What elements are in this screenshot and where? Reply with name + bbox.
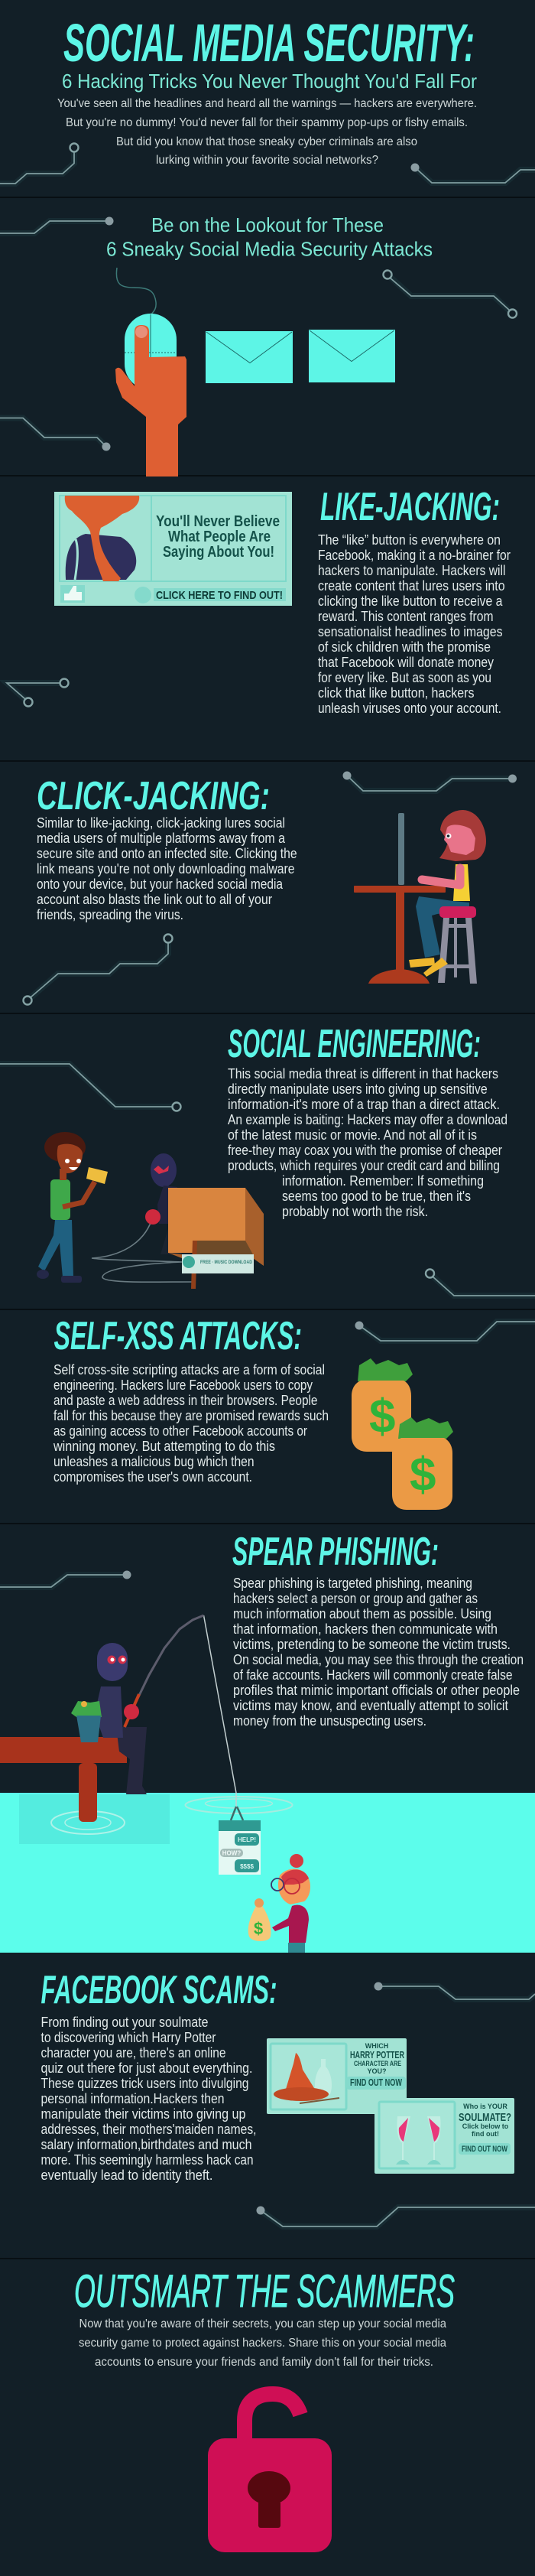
seat	[439, 906, 476, 918]
face and arm	[422, 825, 475, 885]
circuit: self-xss	[355, 1322, 535, 1341]
text: self-xss	[53, 1362, 329, 1485]
panel: soulmate quiz card	[374, 2098, 514, 2174]
water	[0, 1793, 535, 1953]
intro text: You've seen all the headlines and heard all the warnings — hackers are everywhere.	[57, 97, 477, 110]
intro text: But did you know that those sneaky cyber criminals are also	[116, 135, 417, 148]
body	[272, 1905, 309, 1943]
phone	[219, 1820, 261, 1875]
illustration: man with credit card	[37, 1132, 108, 1283]
text: self-xss: fall for this because they are promised rewards such	[54, 1408, 329, 1423]
text: facebook scams: salary information,birthdates and much	[41, 2137, 252, 2152]
pants	[416, 896, 469, 958]
circuit: like-jacking	[7, 679, 69, 707]
text: closing: security game to protect against hackers. Share this on your social media	[79, 2337, 446, 2350]
eyes	[107, 1655, 127, 1664]
text: click-jacking	[37, 815, 297, 922]
hair	[439, 810, 486, 861]
text: click-jacking: account also blasts the link out to all of your	[37, 892, 272, 907]
legs	[38, 1220, 73, 1277]
text: facebook scams: character you are, there's an online	[41, 2045, 226, 2060]
head	[97, 1643, 128, 1681]
ad button: CLICK HERE TO FIND OUT!	[156, 589, 283, 602]
circuit: lower left	[0, 418, 110, 451]
quiz text: WHICH	[365, 2042, 388, 2050]
text: facebook scams: eventually lead to identity theft.	[41, 2168, 212, 2183]
text: social engineering: free-they may coax you with the promise of cheaper	[228, 1143, 502, 1158]
quiz button: FIND OUT NOW	[350, 2077, 403, 2088]
quiz text: CHARACTER ARE	[354, 2060, 401, 2068]
bait card: FREE · MUSIC DOWNLOAD	[200, 1260, 253, 1265]
text: like-jacking: Facebook, making it a no-brainer for	[318, 548, 511, 563]
text: social engineering: information-it's more of a trap than a direct attack.	[228, 1097, 500, 1112]
circuit: spear phishing	[0, 1571, 131, 1587]
text: self-xss: and paste a web address in their browsers. People	[54, 1393, 318, 1408]
circuit: click-jacking bottom	[23, 935, 173, 1005]
text: facebook scams: manipulate their victims into giving up	[41, 2106, 246, 2122]
circuit: social engineering bottom	[426, 1270, 535, 1296]
quiz text	[350, 2042, 404, 2075]
icon: thumbs up	[60, 585, 85, 603]
quiz text: find out!	[472, 2130, 499, 2138]
circuit: top left	[0, 144, 78, 184]
hair	[44, 1132, 86, 1163]
quiz text: Who is YOUR	[463, 2103, 507, 2110]
hacker	[145, 1153, 182, 1254]
text: like-jacking: clicking the like button to receive a	[318, 594, 503, 609]
subtitle: 6 Hacking Tricks You Never Thought You'd Fall For	[62, 70, 477, 93]
circuit: social engineering top	[0, 1064, 180, 1111]
intro text: But you're no dummy! You'd never fall for their spammy pop-ups or fishy emails.	[66, 116, 468, 129]
text: closing: accounts to ensure your friends and family don't fall for their tricks.	[95, 2356, 433, 2369]
text: facebook scams: more. This seemingly harmless hack can	[41, 2152, 254, 2168]
text: click-jacking: friends, spreading the virus.	[37, 907, 183, 922]
quiz text: SOULMATE?	[459, 2111, 511, 2124]
text: like-jacking: sensationalist headlines to images	[318, 624, 503, 639]
text: self-xss: winning money. But attempting to do this	[53, 1439, 275, 1454]
shirt	[50, 1179, 70, 1220]
heading: facebook scams: FACEBOOK SCAMS:	[41, 1968, 277, 2012]
text: social engineering: of the latest music or movie. And not all of it is	[228, 1127, 477, 1143]
text: spear phishing: victims may know, and eventually attempt to solicit	[233, 1698, 508, 1713]
illustration: hacker fishing	[0, 1615, 243, 1822]
illustration: woman with money bag	[248, 1854, 310, 1953]
text: self-xss: as gaining access to other Facebook accounts or	[54, 1423, 307, 1439]
bun	[290, 1854, 303, 1868]
text: click-jacking: secure site and onto an infected site. Clicking the	[37, 846, 297, 861]
hook	[231, 1807, 243, 1820]
text: spear phishing: much information about them as possible. Using	[233, 1606, 491, 1621]
money bag: $	[254, 1919, 263, 1938]
panel: like-jacking ad	[54, 492, 292, 606]
icon: wine glasses	[396, 2116, 441, 2165]
text: social engineering: information. Remember: If something	[282, 1173, 484, 1189]
text: like-jacking: reward. This content ranges from	[318, 609, 494, 624]
neck	[60, 1169, 66, 1180]
lookout heading: Be on the Lookout for These	[151, 213, 384, 236]
circuit: lookout right	[384, 271, 517, 318]
card	[86, 1167, 108, 1184]
ad headline: What People Are	[168, 529, 271, 545]
shoes	[409, 958, 448, 977]
text: spear phishing	[233, 1576, 524, 1729]
arm	[63, 1182, 95, 1207]
top	[453, 864, 470, 901]
text: click-jacking: Similar to like-jacking, click-jacking lures social	[37, 815, 285, 831]
hair	[281, 1869, 309, 1885]
text: facebook scams: quiz out there for just about everything.	[41, 2060, 252, 2076]
text: facebook scams: From finding out your soulmate	[41, 2015, 208, 2030]
icon: envelopes	[206, 330, 395, 383]
text: click-jacking: media users of multiple platforms away from a	[37, 831, 286, 846]
circuit: facebook bottom	[257, 2206, 535, 2226]
box	[168, 1188, 264, 1289]
text: self-xss: Self cross-site scripting attacks are a form of social	[54, 1362, 325, 1377]
heading: self-xss: SELF-XSS ATTACKS:	[54, 1314, 302, 1358]
text: spear phishing: Spear phishing is targeted phishing, meaning	[233, 1576, 472, 1591]
icon: money bag 1: $	[369, 1390, 395, 1443]
circuit: facebook top	[374, 1982, 535, 1999]
wire	[92, 1216, 193, 1282]
text: like-jacking: for every like. But as soon as you	[318, 670, 491, 685]
shoes	[37, 1270, 82, 1283]
bait card	[182, 1254, 254, 1273]
illustration: woman at computer	[354, 810, 486, 984]
text: click-jacking: link means you're not only downloading malware	[37, 861, 295, 877]
icon: money bag 1	[352, 1358, 413, 1452]
ad headline	[156, 513, 280, 561]
glasses	[271, 1878, 300, 1894]
body	[95, 1686, 123, 1738]
text: facebook scams: personal information.Hackers then	[41, 2091, 225, 2106]
how bubble: HOW?	[222, 1849, 241, 1857]
heading: click-jacking: CLICK-JACKING:	[37, 774, 270, 818]
text: like-jacking: create content that lures users into	[318, 578, 505, 594]
text: social engineering: This social media threat is different in that hackers	[228, 1066, 498, 1081]
ad headline: You'll Never Believe	[156, 513, 280, 530]
lookout heading	[106, 213, 433, 260]
circuit: click-jacking top	[342, 771, 517, 791]
text: spear phishing: money from the unsuspecting users.	[233, 1713, 426, 1729]
icon: open padlock	[208, 2394, 332, 2552]
quiz text	[459, 2103, 511, 2138]
quiz text: Click below to	[462, 2122, 509, 2130]
text: like-jacking: click that like button, hackers	[318, 685, 474, 701]
text: closing: Now that you're aware of their secrets, you can step up your social media	[79, 2317, 446, 2330]
icon: mouse and hand	[115, 268, 186, 476]
text: social engineering: directly manipulate users into giving up sensitive	[228, 1081, 488, 1097]
text: like-jacking: The “like” button is everywhere on	[318, 532, 501, 548]
ad figure	[65, 496, 139, 581]
help bubble: HELP!	[238, 1836, 256, 1843]
eyes and mouth	[65, 1159, 81, 1170]
text: facebook scams	[41, 2015, 257, 2183]
text: facebook scams: addresses, their mothers'maiden names,	[41, 2122, 257, 2137]
circuit: lookout left	[0, 217, 113, 233]
text: social engineering: probably not worth the risk.	[282, 1204, 428, 1219]
legs	[116, 1727, 147, 1794]
ad button	[135, 587, 286, 603]
text: social engineering	[228, 1066, 507, 1219]
text: closing	[79, 2317, 446, 2369]
text: like-jacking	[318, 532, 511, 716]
stool	[438, 918, 477, 984]
bucket	[71, 1701, 102, 1742]
rod	[125, 1615, 203, 1727]
text: click-jacking: onto your device, but your hacked social media	[37, 877, 284, 892]
text: social engineering: seems too good to be true, then it's	[282, 1189, 471, 1204]
money bubble: $$$$	[240, 1863, 254, 1870]
quiz button: FIND OUT NOW	[462, 2145, 507, 2154]
text: like-jacking: of sick children with the promise	[318, 639, 491, 655]
text: self-xss: compromises the user's own account.	[54, 1469, 252, 1485]
intro text	[57, 97, 477, 167]
quiz button	[346, 2077, 406, 2090]
fishing line	[203, 1615, 236, 1807]
panel: harry potter quiz card	[267, 2038, 407, 2114]
monitor	[398, 813, 404, 885]
quiz text: HARRY POTTER	[350, 2049, 404, 2060]
desk	[354, 886, 446, 984]
icon: money bag 2: $	[410, 1449, 436, 1501]
quiz text: YOU?	[367, 2067, 387, 2075]
text: facebook scams: These quizzes trick users into divulging	[41, 2076, 249, 2091]
lookout heading: 6 Sneaky Social Media Security Attacks	[106, 237, 433, 260]
text: like-jacking: that Facebook will donate money	[318, 655, 494, 670]
intro text: lurking within your favorite social networks?	[156, 154, 378, 167]
ad headline: Saying About You!	[163, 544, 274, 561]
text: social engineering: products, which requires your credit card and billing	[228, 1158, 500, 1173]
icon: wizard hat	[274, 2053, 339, 2103]
text: self-xss: engineering. Hackers lure Facebook users to copy	[54, 1377, 313, 1393]
water shadow and ripples	[19, 1794, 292, 1844]
text: spear phishing: that information, hackers then communicate with	[233, 1621, 498, 1637]
illustration: hacker in box	[92, 1153, 264, 1289]
text: facebook scams: to discovering which Harry Potter	[41, 2030, 216, 2045]
circuit: top right	[411, 164, 535, 183]
icon: potion bottle	[315, 2059, 332, 2094]
face	[57, 1144, 83, 1173]
text: like-jacking: unleash viruses onto your account.	[318, 701, 501, 716]
text: spear phishing: hackers select a person or group and gather as	[233, 1591, 478, 1606]
quiz button	[459, 2143, 511, 2155]
text: like-jacking: hackers to manipulate. Hackers will	[318, 563, 506, 578]
head	[278, 1869, 310, 1904]
glove	[124, 1704, 139, 1719]
text: self-xss: unleashes a malicious bug which then	[54, 1454, 254, 1469]
dock	[0, 1737, 127, 1822]
icon: money bag 2	[392, 1417, 453, 1510]
legs	[288, 1943, 305, 1953]
